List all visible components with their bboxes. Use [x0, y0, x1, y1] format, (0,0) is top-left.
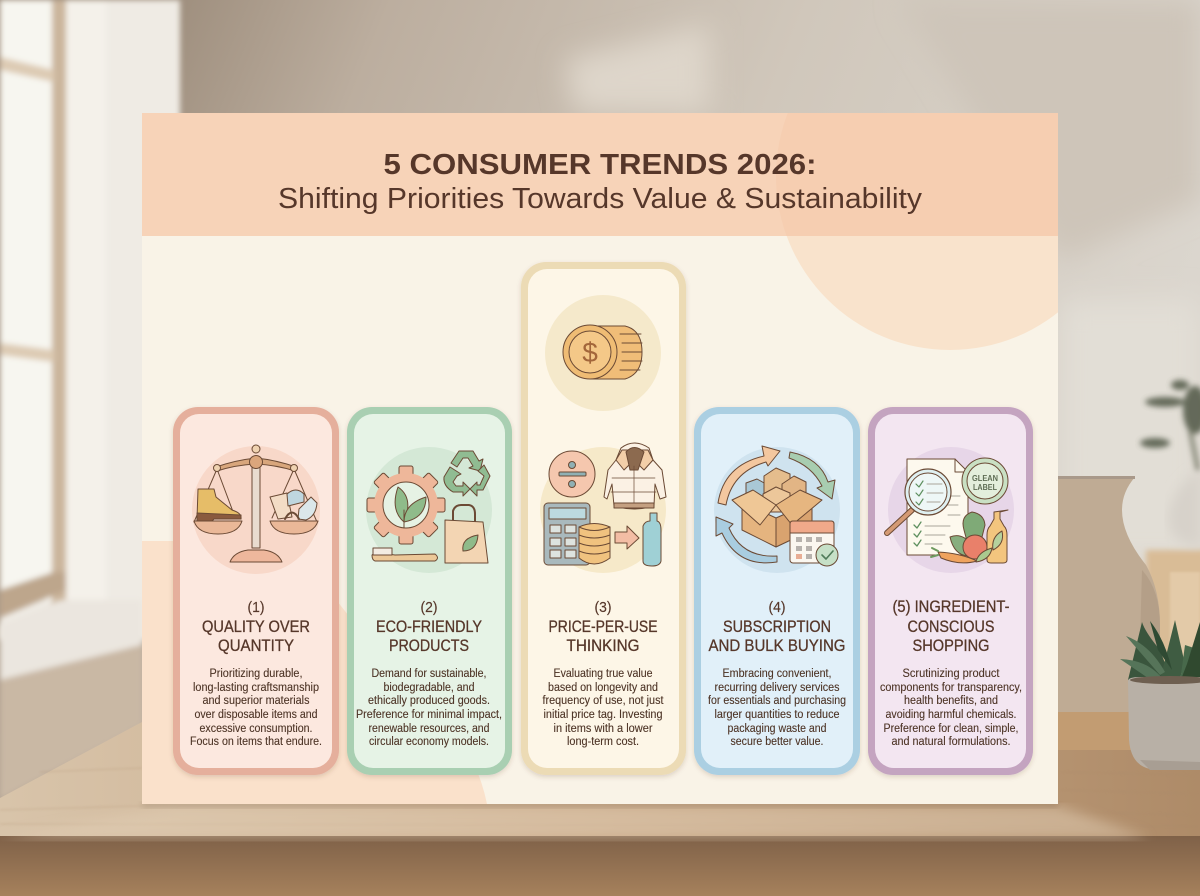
icon: box with cycle arrows and calendar: [716, 446, 838, 566]
card 3: price-per-use thinking: (3): [594, 599, 612, 616]
card 5: ingredient-conscious shopping: components for transparency,: [880, 680, 1022, 694]
card 4: subscription and bulk buying: secure better value.: [730, 734, 824, 748]
card 4: subscription and bulk buying: (4): [768, 599, 786, 616]
card 5: ingredient-conscious shopping: and natural formulations.: [892, 734, 1010, 748]
card 3: price-per-use thinking: Evaluating true value: [554, 666, 653, 680]
card 3: price-per-use thinking: [521, 262, 686, 775]
card 5: ingredient-conscious shopping: (5) INGREDIENT-: [892, 598, 1010, 616]
card 5: ingredient-conscious shopping: GLEAN: [972, 473, 998, 483]
card 3: price-per-use thinking: frequency of use, not just: [542, 693, 664, 707]
icon: coins: [563, 325, 642, 379]
card 4: subscription and bulk buying: AND BULK BUYING: [708, 637, 846, 655]
card 2: eco-friendly products: Preference for minimal impact,: [356, 707, 502, 721]
icon: price per use objects: [544, 443, 666, 566]
card 1: quality over quantity: over disposable items and: [194, 707, 318, 721]
card 5: ingredient-conscious shopping: SHOPPING: [912, 637, 990, 655]
card 2: eco-friendly products: ethically produced goods.: [368, 693, 490, 707]
card 5: ingredient-conscious shopping: [868, 407, 1033, 775]
card 1: quality over quantity: and superior materials: [202, 693, 310, 707]
card 2: eco-friendly products: ECO-FRIENDLY: [376, 618, 482, 636]
card 2: eco-friendly products: Demand for sustainable,: [372, 666, 486, 680]
card 1: quality over quantity: excessive consumption.: [200, 721, 312, 735]
card 3: price-per-use thinking: in items with a lower: [554, 721, 652, 735]
card 5: ingredient-conscious shopping: Preference for clean, simple,: [884, 721, 1018, 735]
icon: produce and bottle: [931, 510, 1008, 563]
card 1: quality over quantity: Focus on items that endure.: [190, 734, 322, 748]
icon: balance scale: [194, 445, 318, 562]
card 1: quality over quantity: long-lasting craftsmanship: [193, 680, 319, 694]
card 3: price-per-use thinking: initial price tag. Investing: [544, 707, 663, 721]
card 4: subscription and bulk buying: larger quantities to reduce: [714, 707, 840, 721]
background plant and cabinet: [1140, 380, 1200, 700]
card 2: eco-friendly products: [347, 407, 512, 775]
card 5: ingredient-conscious shopping: avoiding harmful chemicals.: [886, 707, 1016, 721]
header band: [142, 113, 1058, 236]
card 2: eco-friendly products: renewable resources, and: [368, 721, 490, 735]
card 5: ingredient-conscious shopping: health benefits, and: [904, 693, 998, 707]
card 3: price-per-use thinking: long-term cost.: [567, 734, 639, 748]
title: 5 CONSUMER TRENDS 2026:: [384, 149, 816, 181]
card 4: subscription and bulk buying: SUBSCRIPTION: [723, 618, 831, 636]
card 1: quality over quantity: QUANTITY: [218, 637, 294, 655]
card 2: eco-friendly products: circular economy models.: [369, 734, 489, 748]
subtitle: Shifting Priorities Towards Value & Sustainability: [278, 183, 923, 215]
card 4: subscription and bulk buying: packaging waste and: [728, 721, 827, 735]
card 3: price-per-use thinking: based on longevity and: [548, 680, 658, 694]
card 2: eco-friendly products: (2): [420, 599, 438, 616]
card 4: subscription and bulk buying: recurring delivery services: [714, 680, 840, 694]
card 5: ingredient-conscious shopping: LABEL: [973, 482, 997, 492]
card 1: quality over quantity: Prioritizing durable,: [210, 666, 302, 680]
vase: [1058, 476, 1160, 750]
card 5: ingredient-conscious shopping: CONSCIOUS: [908, 618, 994, 636]
card 3: price-per-use thinking: THINKING: [566, 637, 640, 655]
card 4: subscription and bulk buying: Embracing convenient,: [722, 666, 832, 680]
card 4: subscription and bulk buying: for essentials and purchasing: [708, 693, 846, 707]
card 5: ingredient-conscious shopping: Scrutinizing product: [902, 666, 1000, 680]
card 1: quality over quantity: (1): [248, 599, 264, 616]
card 3: price-per-use thinking: PRICE-PER-USE: [548, 618, 658, 636]
card 2: eco-friendly products: biodegradable, and: [384, 680, 475, 694]
succulent pot: [1120, 620, 1200, 770]
card 2: eco-friendly products: PRODUCTS: [389, 637, 469, 655]
panel: poster: [142, 113, 1058, 804]
card 1: quality over quantity: QUALITY OVER: [202, 618, 310, 636]
card 1: quality over quantity: [173, 407, 339, 775]
card 3: price-per-use thinking: $: [582, 337, 598, 368]
card 4: subscription and bulk buying: [694, 407, 860, 775]
icon: label inspection with produce: [887, 458, 1008, 555]
icon: gear, recycling, bag, toothbrush: [367, 451, 490, 563]
